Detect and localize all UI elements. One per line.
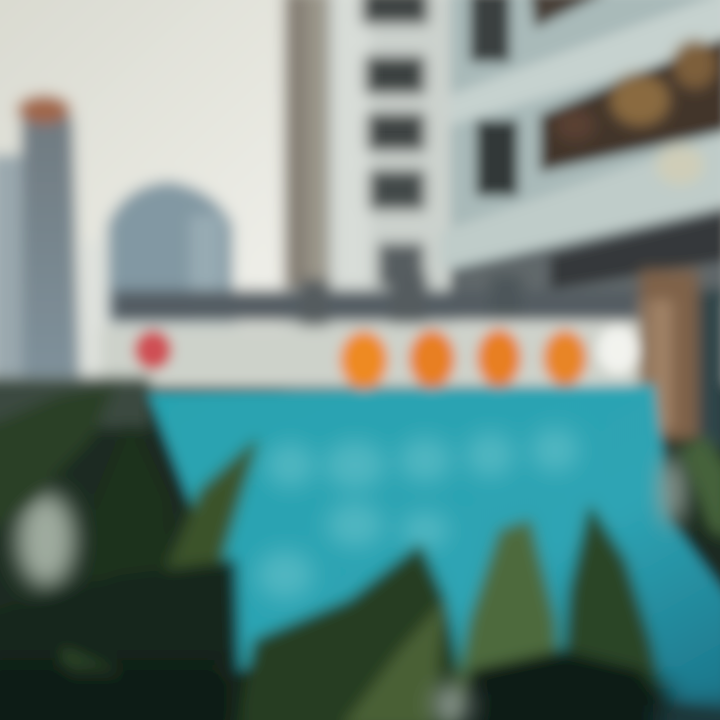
- grey glare at right: [658, 454, 686, 526]
- left distant tower: [0, 96, 104, 380]
- teal pool panel: [148, 384, 720, 710]
- middle distant tower: [108, 182, 238, 375]
- sky: [0, 0, 720, 400]
- horizontal walkway band: [112, 275, 642, 335]
- pool grid highlights: [257, 428, 579, 599]
- palm leaves: [0, 385, 720, 720]
- brown window details: [555, 41, 717, 185]
- right building with balconies: [440, 0, 720, 300]
- lower base foliage: [0, 385, 720, 720]
- red circle: [134, 330, 172, 370]
- dark ground band at left: [0, 378, 150, 428]
- white glare at lower left: [16, 492, 76, 588]
- white circle: [597, 326, 639, 374]
- central white tower: [285, 0, 455, 385]
- podium strip behind circles: [100, 325, 645, 385]
- brown column at right: [640, 270, 720, 450]
- orange circles: [340, 329, 587, 389]
- dark foreground foliage: [0, 665, 720, 720]
